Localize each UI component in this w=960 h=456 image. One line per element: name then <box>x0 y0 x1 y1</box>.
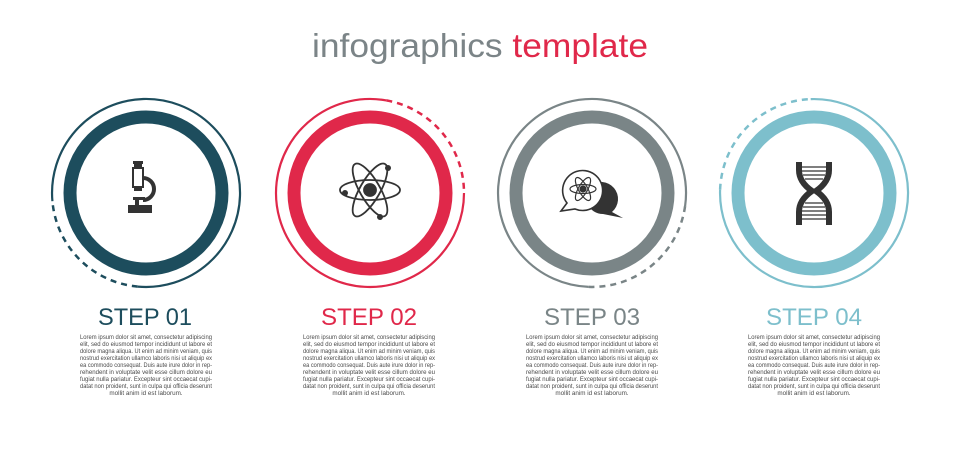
step 1 text: elit, sed do eiusmod tempor incididunt ut labore et <box>80 341 212 348</box>
step 1 text: mollit anim id est laborum. <box>109 390 183 397</box>
step 1 text: ea commodo consequat. Duis aute irure dolor in rep- <box>80 362 212 369</box>
step 3 text <box>526 334 659 397</box>
step 1 heading: STEP 01 <box>98 304 192 331</box>
step 1 text: rehendent in voluptate velit esse cillum dolore eu <box>80 369 212 376</box>
ring 2 <box>276 99 464 287</box>
step 3 text: nostrud exercitation ullamco laboris nisi ut aliquip ex <box>526 355 659 362</box>
step 2 text: fugiat nulla pariatur. Excepteur sint occaecat cupi- <box>303 376 435 383</box>
step 2 text: dolore magna aliqua. Ut enim ad minim veniam, quis <box>303 348 435 355</box>
step 1 text: fugiat nulla pariatur. Excepteur sint occaecat cupi- <box>80 376 212 383</box>
step 1 panel <box>52 99 240 397</box>
step 2 heading: STEP 02 <box>321 304 417 331</box>
step 2 text <box>303 334 436 397</box>
icon: atom <box>340 159 400 221</box>
step 3 text: dolore magna aliqua. Ut enim ad minim veniam, quis <box>526 348 658 355</box>
step 3 text: fugiat nulla pariatur. Excepteur sint occaecat cupi- <box>526 376 658 383</box>
step 2 text: rehendent in voluptate velit esse cillum dolore eu <box>303 369 435 376</box>
icon: DNA <box>799 162 829 225</box>
step 3 text: Lorem ipsum dolor sit amet, consectetur adipiscing <box>526 334 658 341</box>
step 4 text <box>748 334 881 397</box>
step 1 text: Lorem ipsum dolor sit amet, consectetur adipiscing <box>80 334 212 341</box>
step 4 text: ea commodo consequat. Duis aute irure dolor in rep- <box>748 362 880 369</box>
step 3 heading: STEP 03 <box>544 304 640 331</box>
step 1 text: nostrud exercitation ullamco laboris nisi ut aliquip ex <box>80 355 213 362</box>
step 4 text: Lorem ipsum dolor sit amet, consectetur adipiscing <box>748 334 880 341</box>
step 3 text: ea commodo consequat. Duis aute irure dolor in rep- <box>526 362 658 369</box>
step 4 text: rehendent in voluptate velit esse cillum dolore eu <box>748 369 880 376</box>
step 2 text: elit, sed do eiusmod tempor incididunt ut labore et <box>303 341 435 348</box>
step 3 text: elit, sed do eiusmod tempor incididunt ut labore et <box>526 341 658 348</box>
step 4 text: fugiat nulla pariatur. Excepteur sint occaecat cupi- <box>748 376 880 383</box>
icon: chat bubbles with atom <box>561 171 623 218</box>
step 1 text <box>80 334 213 397</box>
step 2 text: Lorem ipsum dolor sit amet, consectetur adipiscing <box>303 334 435 341</box>
step 2 text: nostrud exercitation ullamco laboris nisi ut aliquip ex <box>303 355 436 362</box>
step 3 panel <box>498 99 686 397</box>
step 1 text: datat non proident, sunt in culpa qui officia deserunt <box>80 383 212 390</box>
ring 1 <box>52 99 240 287</box>
icon: microscope <box>128 161 154 213</box>
step 2 panel <box>276 99 464 397</box>
step 4 text: mollit anim id est laborum. <box>777 390 851 397</box>
ring 3 <box>498 99 686 287</box>
step 4 text: nostrud exercitation ullamco laboris nisi ut aliquip ex <box>748 355 881 362</box>
step 3 text: datat non proident, sunt in culpa qui officia deserunt <box>526 383 658 390</box>
step 3 text: mollit anim id est laborum. <box>555 390 629 397</box>
step 4 text: elit, sed do eiusmod tempor incididunt ut labore et <box>748 341 880 348</box>
step 1 text: dolore magna aliqua. Ut enim ad minim veniam, quis <box>80 348 212 355</box>
step 2 text: ea commodo consequat. Duis aute irure dolor in rep- <box>303 362 435 369</box>
ring 4 <box>720 99 908 287</box>
step 4 heading: STEP 04 <box>766 304 862 331</box>
step 4 text: datat non proident, sunt in culpa qui officia deserunt <box>748 383 880 390</box>
title: infographics template <box>312 27 648 64</box>
step 2 text: mollit anim id est laborum. <box>332 390 406 397</box>
step 3 text: rehendent in voluptate velit esse cillum dolore eu <box>526 369 658 376</box>
step 4 panel <box>720 99 908 397</box>
step 2 text: datat non proident, sunt in culpa qui officia deserunt <box>303 383 435 390</box>
step 4 text: dolore magna aliqua. Ut enim ad minim veniam, quis <box>748 348 880 355</box>
